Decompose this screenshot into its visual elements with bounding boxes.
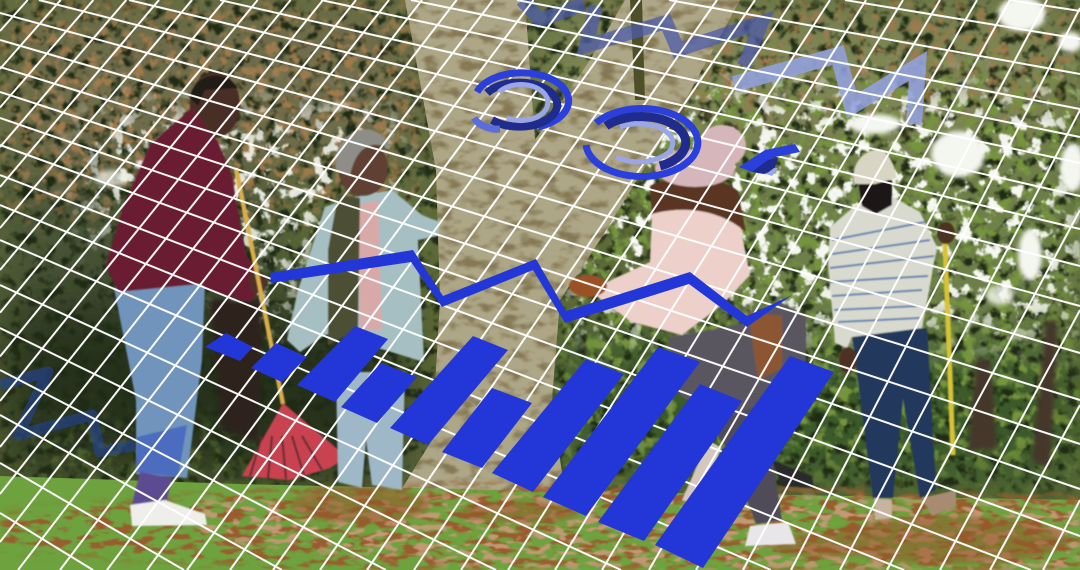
trousers — [336, 372, 405, 490]
jacket — [590, 205, 750, 335]
rake tines — [250, 436, 322, 479]
trousers — [668, 302, 806, 420]
blue tinted jean patch — [136, 425, 187, 477]
sock — [132, 472, 172, 504]
foliage texture: white sky gaps — [90, 90, 1080, 330]
held leaves — [569, 275, 607, 297]
gauge ring 1 — [474, 73, 569, 129]
bar chart — [205, 326, 834, 568]
hat — [655, 125, 746, 187]
sweater stripes — [830, 222, 934, 322]
rake — [236, 168, 347, 480]
main tree trunk — [398, 0, 740, 495]
rake head — [242, 403, 347, 480]
jeans — [852, 328, 936, 498]
hair — [650, 178, 746, 232]
dark branch — [630, 0, 645, 100]
hands — [937, 222, 955, 244]
brown skin — [748, 312, 782, 380]
face and beard — [858, 180, 892, 214]
dark zigzag section — [522, 0, 762, 66]
person 4: striped sweater — [828, 150, 956, 520]
gauge ring 3 — [739, 144, 800, 176]
jacket — [106, 108, 266, 302]
gauge ring 2 — [586, 109, 698, 177]
person 2: cardigan — [287, 129, 440, 490]
line chart — [270, 250, 792, 327]
foliage texture: autumn leaves — [0, 0, 1080, 210]
scarf — [328, 195, 360, 345]
pink shirt — [358, 200, 382, 330]
bark texture — [398, 0, 740, 495]
shoes — [745, 522, 796, 546]
person 1: maroon jacket — [106, 72, 267, 526]
fallen autumn leaves — [0, 482, 1080, 570]
pale front leg — [682, 440, 722, 505]
head — [336, 129, 390, 196]
shoe — [130, 500, 207, 526]
pale dry leaves — [200, 490, 1080, 570]
ground: grass — [0, 476, 1080, 570]
person 3: pink jacket — [569, 125, 814, 546]
distant tree trunks — [210, 300, 1058, 470]
hand — [249, 271, 267, 293]
jeans — [114, 282, 205, 478]
beanie — [853, 150, 896, 184]
dark boot — [772, 460, 814, 488]
rear leg — [690, 376, 782, 524]
cardigan — [287, 190, 440, 362]
white sky patches — [94, 0, 1080, 305]
leaf pile — [290, 487, 1070, 564]
faded zigzag chart: top — [522, 0, 918, 124]
shoes — [874, 498, 892, 520]
light zigzag section — [734, 55, 918, 124]
faded blue zigzag bottom left — [0, 372, 135, 452]
sweater — [828, 197, 937, 348]
yellow rake handle — [945, 244, 953, 455]
foliage texture: green leaves — [20, 70, 1080, 475]
head — [190, 72, 240, 138]
